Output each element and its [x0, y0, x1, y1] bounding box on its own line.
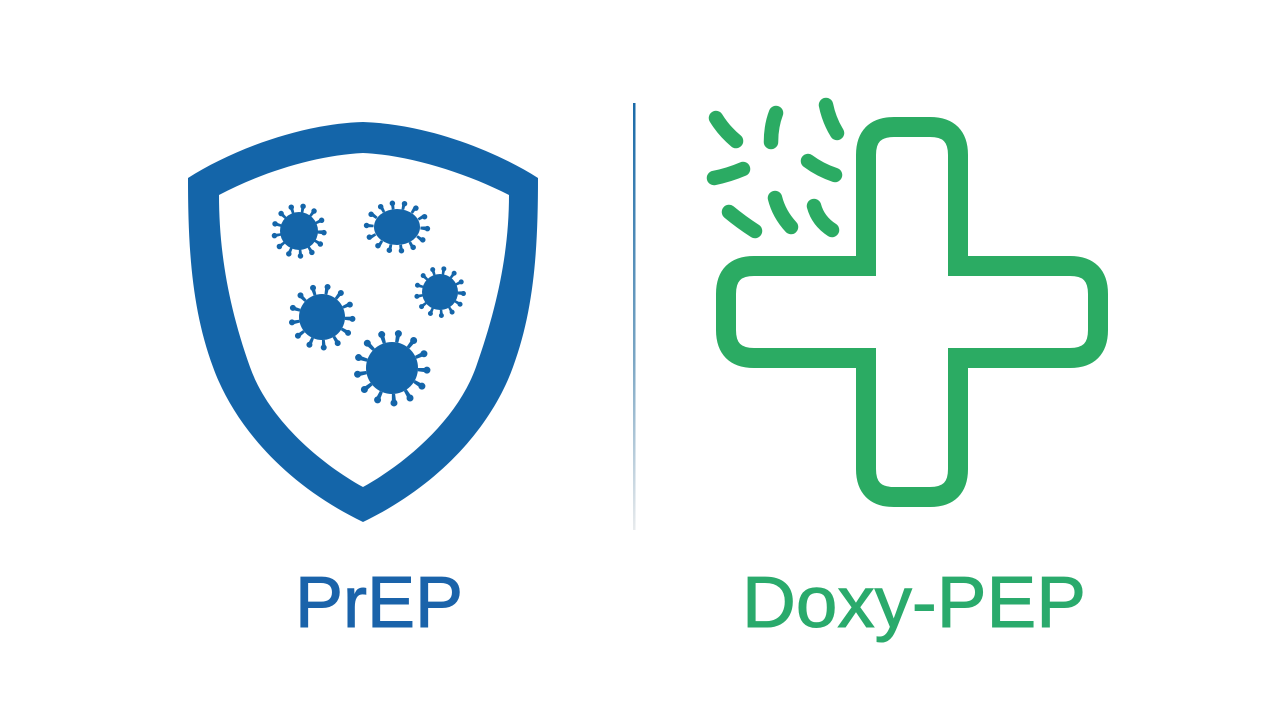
icon: virus 4 — [292, 286, 352, 348]
heading: PrEP: PrEP — [295, 563, 463, 643]
icon: virus 1 — [274, 206, 324, 256]
icon: virus 2 — [366, 203, 428, 251]
panel: Doxy-PEP — [714, 105, 1098, 643]
panel: PrEP — [188, 122, 538, 643]
icon: shield — [188, 122, 538, 522]
icon: virus 5 — [357, 333, 427, 403]
heading: Doxy-PEP: Doxy-PEP — [742, 563, 1086, 643]
divider — [633, 103, 636, 530]
icon: bacteria cluster — [714, 105, 837, 231]
icon: virus 3 — [416, 268, 464, 316]
icon: medical cross outline — [726, 127, 1098, 497]
